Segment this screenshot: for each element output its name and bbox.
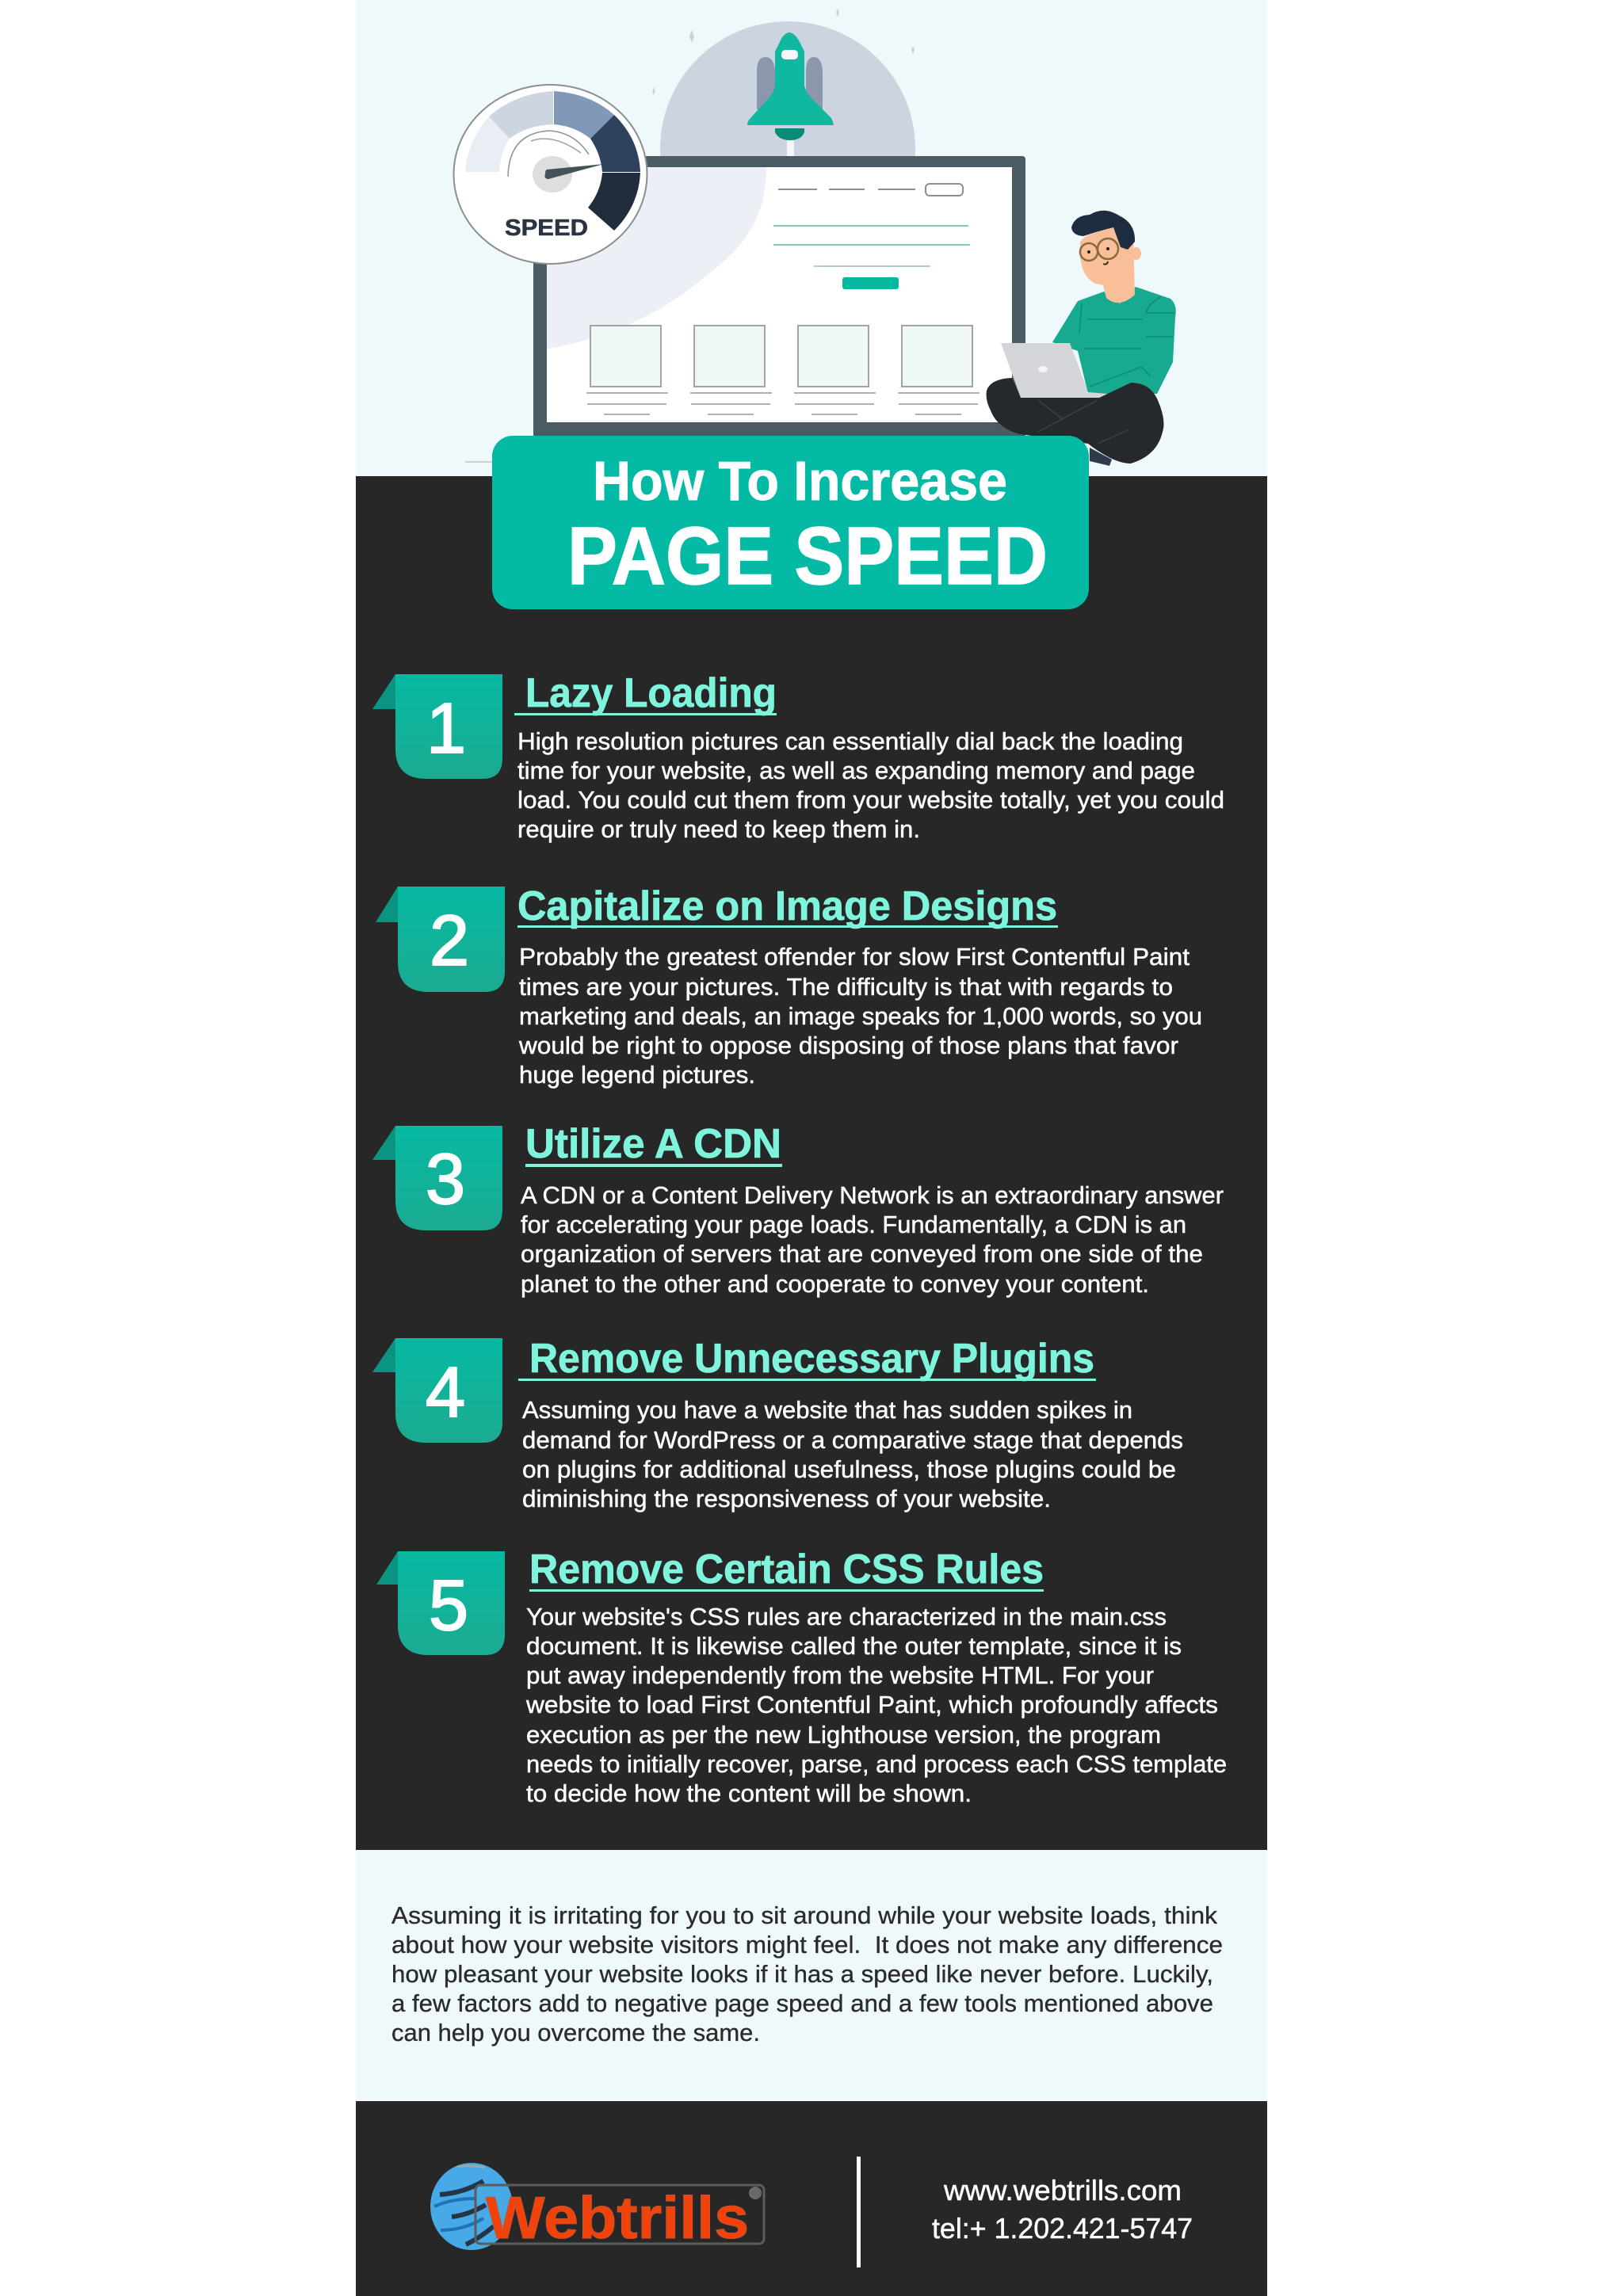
panel: step 5 [376,1547,1227,1807]
icon: faint ground line [465,461,492,463]
text block: step 1 body: load. You could cut them from your website totally, yet you could [517,786,1224,814]
text block: step 5 body: needs to initially recover, parse, and process each CSS template [526,1750,1227,1778]
text block: step 4 body: diminishing the responsiveness of your website. [522,1485,1051,1512]
panel: step 3 [372,1121,1224,1298]
icon: number badge 2 [376,887,505,992]
icon: number badge 5 [376,1551,505,1655]
heading: remove unnecessary plugins: Remove Unnecessary Plugins [529,1336,1094,1382]
heading: page speed: PAGE SPEED [567,510,1048,601]
icon: number badge 4: 4 [426,1353,465,1432]
text block: contact details: tel:+ 1.202.421-5747 [932,2212,1193,2245]
gauge label: SPEED [505,215,588,241]
panel: dark steps section [356,476,1267,1850]
heading: utilize a cdn: Utilize A CDN [525,1121,781,1167]
text block: step 5 body: Your website's CSS rules are characterized in the main.css [526,1603,1167,1630]
panel: light conclusion section [356,1850,1267,2101]
text block: step 5 body [525,1603,1227,1807]
icon: rocket [747,32,834,157]
content cards [590,326,972,387]
text block: conclusion paragraph: about how your website visitors might feel. It does not make any difference [391,1931,1223,1958]
text block: contact details [932,2174,1193,2245]
panel: step 2 [376,883,1202,1089]
icon: number badge 5: 5 [429,1566,468,1646]
text block: step 5 body: to decide how the content will be shown. [526,1779,972,1807]
text block: step 3 body: planet to the other and cooperate to convey your content. [521,1270,1149,1298]
text block: step 1 body: time for your website, as well as expanding memory and page [517,757,1195,784]
text block: step 2 body: Probably the greatest offender for slow First Contentful Paint [519,943,1190,971]
icon: speed gauge [453,85,647,264]
text block: step 5 body: execution as per the new Lighthouse version, the program [526,1721,1161,1749]
text block: step 2 body [518,943,1202,1089]
icon: Webtrills logo [430,2163,764,2251]
icon: number badge 3 [372,1126,502,1230]
text block: step 5 body: put away independently from the website HTML. For your [526,1661,1154,1689]
text block: step 2 body: marketing and deals, an image speaks for 1,000 words, so you [519,1002,1202,1030]
icon: number badge 2: 2 [430,902,469,981]
text block: step 5 body: document. It is likewise called the outer template, since it is [526,1632,1182,1660]
text block: step 5 body: website to load First Contentful Paint, which profoundly affects [525,1691,1218,1718]
heading: how to increase: How To Increase [593,450,1007,512]
text block: step 1 body [517,727,1224,843]
text block: step 4 body: Assuming you have a website that has sudden spikes in [522,1396,1132,1424]
icon: number badge 3: 3 [426,1140,465,1219]
panel: hero illustration background [356,0,1267,477]
icon: number badge 1: 1 [426,689,466,769]
card caption lines [586,392,980,415]
heading: capitalize on image designs: Capitalize on Image Designs [517,883,1057,929]
title banner [492,436,1089,609]
icon: hero illustration [453,9,1176,466]
text block: conclusion paragraph [391,1901,1223,2046]
text block: conclusion paragraph: can help you overcome the same. [391,2019,760,2046]
panel: step 1 [372,670,1224,843]
heading: remove certain css rules: Remove Certain CSS Rules [529,1547,1044,1592]
text block: step 4 body [522,1396,1183,1512]
text block: step 1 body: require or truly need to keep them in. [517,815,920,843]
icon: sparkles [652,9,915,95]
text block: conclusion paragraph: a few factors add to negative page speed and a few tools mentioned above [391,1989,1213,2017]
text block: step 4 body: on plugins for additional usefulness, those plugins could be [522,1455,1176,1483]
icon: man with laptop [987,211,1176,466]
text block: step 3 body [521,1181,1224,1298]
text block: conclusion paragraph: Assuming it is irritating for you to sit around while your website loads, think [391,1901,1217,1929]
icon: Webtrills logo: Webtrills [486,2184,749,2251]
hero text lines [773,225,968,227]
text block: step 3 body: A CDN or a Content Delivery Network is an extraordinary answer [521,1181,1224,1209]
text block: step 2 body: times are your pictures. The difficulty is that with regards to [519,973,1173,1001]
text block: step 4 body: demand for WordPress or a comparative stage that depends [522,1426,1183,1454]
text block: conclusion paragraph: how pleasant your website looks if it has a speed like never before. Luckily, [391,1960,1213,1988]
divider line [857,2157,861,2267]
icon: number badge 4 [372,1338,502,1443]
nav bar lines [778,189,915,190]
text block: step 3 body: organization of servers that are conveyed from one side of the [521,1240,1203,1268]
text block: contact details: www.webtrills.com [943,2174,1182,2206]
text block: step 1 body: High resolution pictures can essentially dial back the loading [517,727,1183,755]
icon: number badge 1 [372,674,502,779]
panel: step 4 [372,1336,1183,1512]
text block: step 3 body: for accelerating your page loads. Fundamentally, a CDN is an [521,1211,1186,1238]
text block: step 2 body: huge legend pictures. [519,1061,755,1089]
icon: website monitor [533,156,1025,438]
heading: lazy loading: Lazy Loading [525,670,777,716]
cta button [842,277,899,289]
panel: dark footer [356,2101,1267,2296]
icon: circle behind rocket [660,21,915,277]
text block: step 2 body: would be right to oppose disposing of those plans that favor [518,1032,1178,1059]
